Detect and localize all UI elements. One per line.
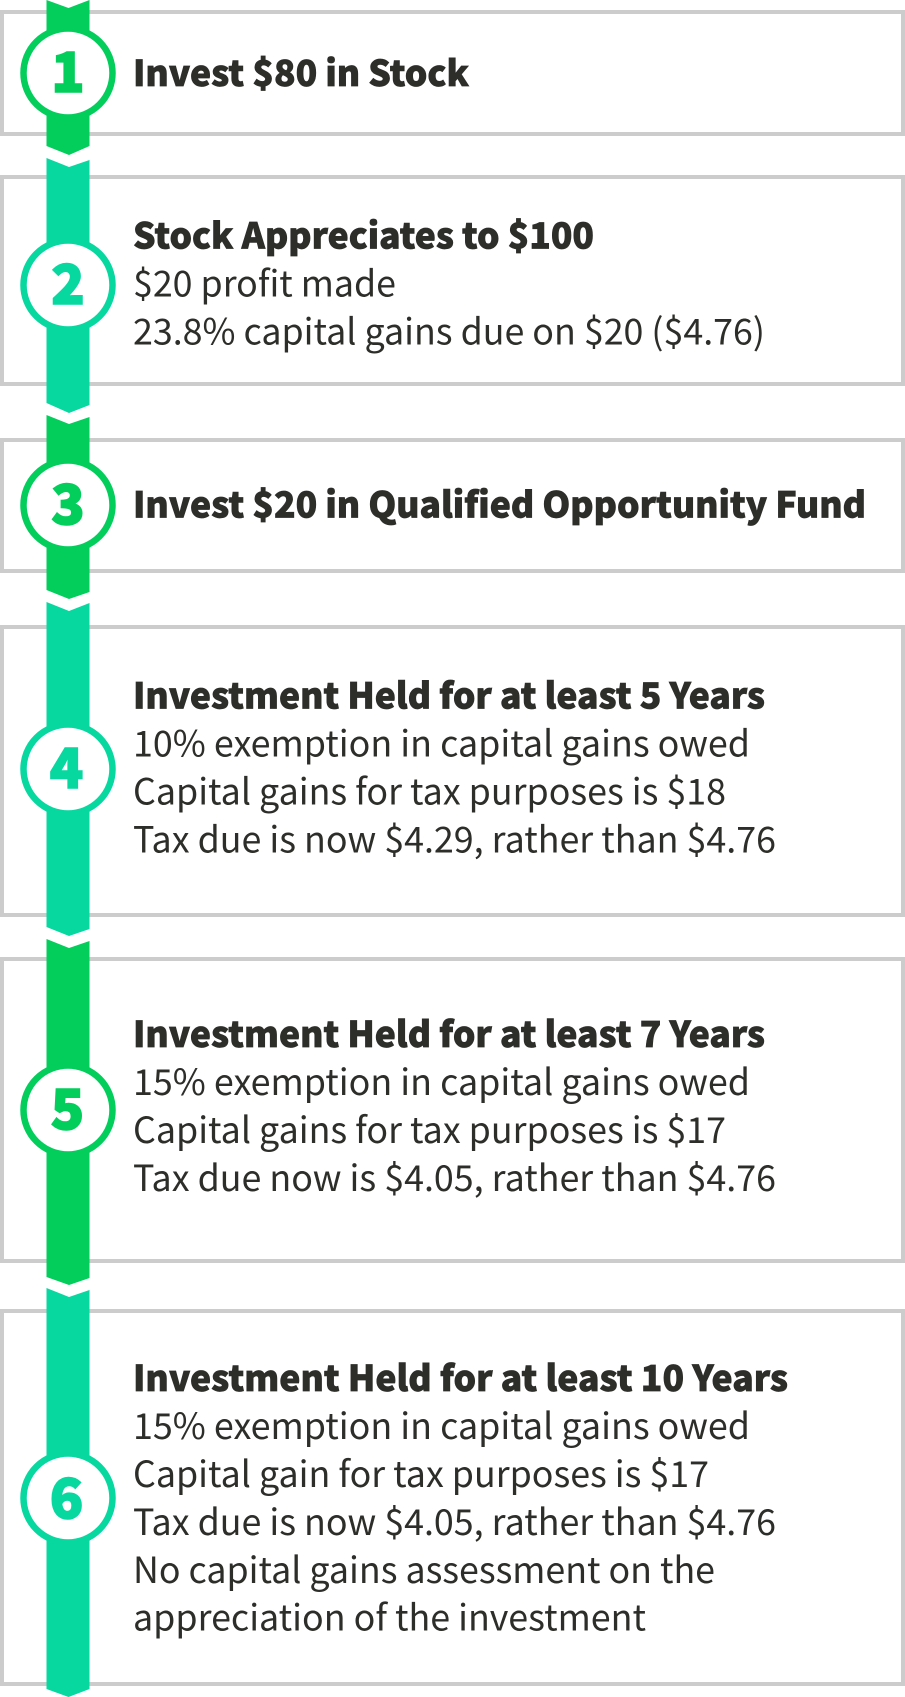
timeline segment 2 with number badge: 2 bbox=[51, 240, 85, 320]
step 3 text: Invest $20 in Qualified Opportunity Fund bbox=[133, 478, 866, 528]
step 2 text: $20 profit made bbox=[133, 256, 396, 308]
step 6 text: 15% exemption in capital gains owed bbox=[133, 1398, 750, 1450]
step 4 text bbox=[133, 668, 776, 864]
step 6 text: appreciation of the investment bbox=[133, 1590, 646, 1642]
panel: step 5 box bbox=[2, 959, 903, 1261]
timeline segment 1 with number badge bbox=[24, 0, 112, 155]
step 2 text: Stock Appreciates to $100 bbox=[133, 208, 594, 260]
panel: step 2 box bbox=[2, 177, 903, 384]
step 5 text: 15% exemption in capital gains owed bbox=[133, 1054, 750, 1106]
step 2 text: 23.8% capital gains due on $20 ($4.76) bbox=[133, 304, 765, 356]
step 2 text bbox=[133, 208, 765, 356]
step 6 text: Investment Held for at least 10 Years bbox=[133, 1351, 788, 1402]
step 6 text: No capital gains assessment on the bbox=[133, 1542, 715, 1594]
step 5 text: Capital gains for tax purposes is $17 bbox=[133, 1102, 726, 1154]
timeline segment 5 with number badge: 5 bbox=[51, 1065, 84, 1145]
panel: step 6 box bbox=[2, 1311, 903, 1684]
step 4 text: Tax due is now $4.29, rather than $4.76 bbox=[133, 812, 776, 864]
panel: step 4 box bbox=[2, 627, 903, 915]
timeline segment 3 with number badge bbox=[24, 415, 112, 599]
timeline segment 4 with number badge: 4 bbox=[50, 724, 83, 804]
timeline segment 1 with number badge: 1 bbox=[51, 28, 85, 108]
step 6 text: Capital gain for tax purposes is $17 bbox=[133, 1446, 709, 1498]
timeline segment 5 with number badge bbox=[24, 939, 112, 1285]
timeline segment 2 with number badge bbox=[24, 158, 112, 413]
step 1 text: Invest $80 in Stock bbox=[133, 46, 469, 97]
step 4 text: 10% exemption in capital gains owed bbox=[133, 716, 750, 768]
timeline segment 6 with number badge: 6 bbox=[50, 1454, 83, 1534]
step 6 text bbox=[133, 1351, 788, 1642]
step 5 text: Tax due now is $4.05, rather than $4.76 bbox=[133, 1150, 776, 1202]
step 5 text bbox=[133, 1007, 776, 1202]
panel: step 1 box bbox=[2, 12, 903, 134]
panel: step 3 box bbox=[2, 440, 903, 571]
step 4 text: Investment Held for at least 5 Years bbox=[133, 668, 765, 720]
timeline segment 3 with number badge: 3 bbox=[51, 460, 85, 540]
timeline segment 4 with number badge bbox=[24, 602, 112, 936]
step 4 text: Capital gains for tax purposes is $18 bbox=[133, 764, 726, 816]
step 5 text: Investment Held for at least 7 Years bbox=[133, 1007, 765, 1058]
step 6 text: Tax due is now $4.05, rather than $4.76 bbox=[133, 1494, 776, 1546]
timeline segment 6 with number badge bbox=[24, 1288, 112, 1697]
